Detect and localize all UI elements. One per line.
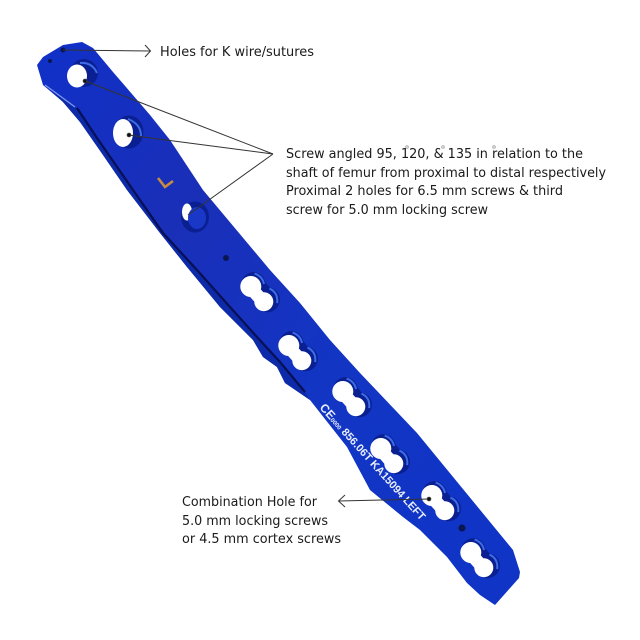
label: screw angles: shaft of femur from proximal to distal respectively [286, 166, 606, 181]
engraved text: CE0000 856.06T KA15094 LEFT [317, 401, 429, 523]
label: screw angles: Proximal 2 holes for 6.5 mm screws & third [286, 184, 563, 199]
plate body [37, 42, 520, 605]
label: combination hole [182, 495, 341, 547]
label: combination hole: or 4.5 mm cortex screws [182, 532, 341, 547]
plate side wall [45, 85, 310, 400]
hole 1 [67, 59, 98, 88]
label: combination hole: 5.0 mm locking screws [182, 514, 328, 529]
arrow: combination hole [338, 495, 431, 507]
combination holes [235, 267, 505, 584]
small holes [48, 48, 466, 532]
label: screw angles: screw for 5.0 mm locking screw [286, 203, 488, 218]
label: screw angles [286, 147, 606, 218]
label: screw angles: Screw angled 95, 120, & 135 in relation to the [286, 147, 583, 162]
degree marks [406, 146, 495, 148]
plate: blue locking femoral plate [37, 42, 520, 605]
label: holes for K wire: Holes for K wire/sutures [160, 45, 314, 60]
hole 2 [113, 116, 144, 148]
leader lines: screw holes [83, 79, 273, 215]
L mark [158, 178, 173, 187]
label: combination hole: Combination Hole for [182, 495, 318, 510]
arrow: K wire holes [63, 45, 150, 57]
hole 3 [181, 202, 209, 232]
light edge highlight [45, 85, 75, 107]
dark underside edge [77, 108, 305, 392]
